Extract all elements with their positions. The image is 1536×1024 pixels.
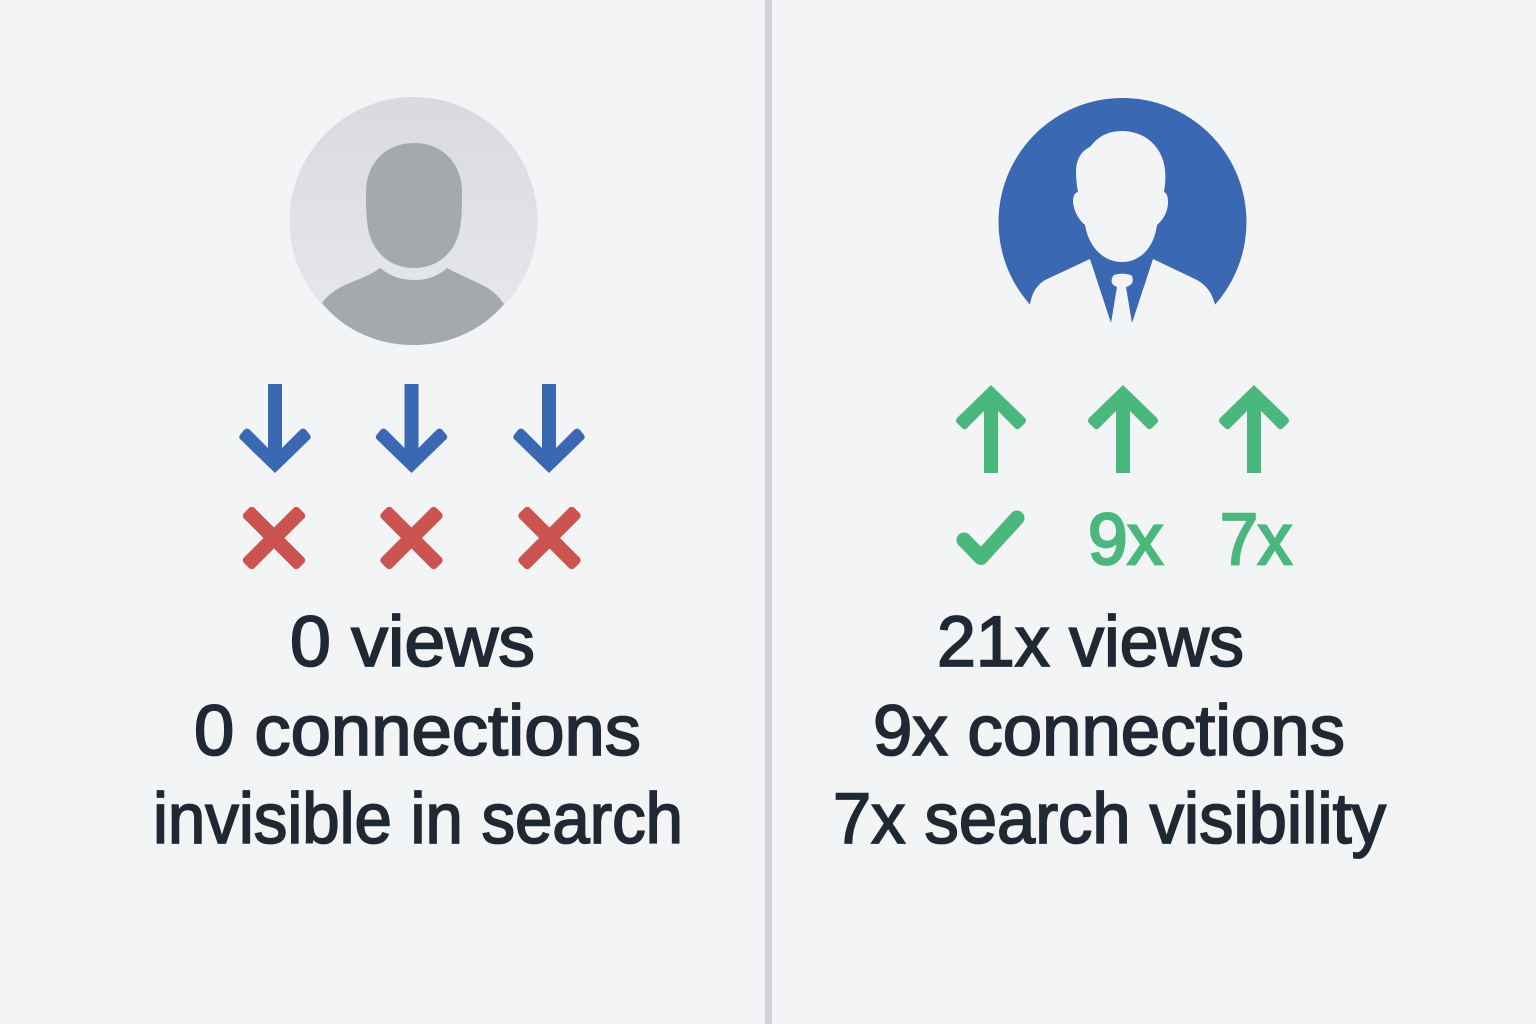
icon: blank grey avatar	[290, 97, 538, 345]
text: empty profile stats	[153, 602, 683, 858]
icon: blue down arrows	[239, 384, 585, 473]
text: complete profile stats: 21x views	[937, 602, 1244, 681]
text: complete profile stats	[833, 602, 1386, 858]
icon: green check mark	[964, 518, 1017, 558]
text: complete profile stats: 7x search visibility	[833, 779, 1386, 858]
panel: empty profile	[153, 97, 683, 858]
icon: green up arrows	[956, 385, 1289, 473]
text: empty profile stats: invisible in search	[153, 779, 683, 858]
text: empty profile stats: 0 views	[290, 602, 535, 681]
icon: blue professional avatar	[999, 98, 1246, 323]
panel: complete profile	[833, 98, 1386, 858]
icon: red crosses	[243, 507, 581, 569]
text: empty profile stats: 0 connections	[194, 691, 641, 770]
text: 7x multiplier: 7x	[1220, 499, 1292, 579]
text: complete profile stats: 9x connections	[873, 691, 1345, 770]
text: 9x multiplier: 9x	[1088, 499, 1163, 579]
